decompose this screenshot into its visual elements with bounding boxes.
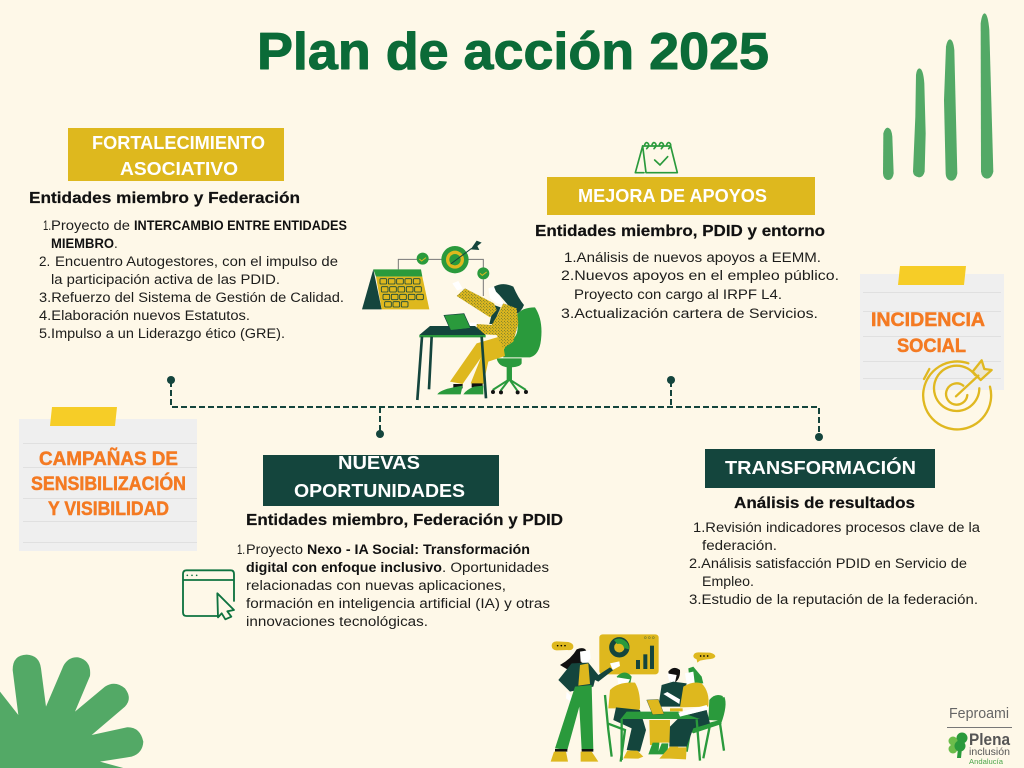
decoration: green bars	[883, 13, 993, 181]
paper	[860, 274, 1004, 390]
heading: mejora de apoyos	[547, 177, 815, 215]
seated person left	[608, 672, 646, 759]
list: nuevas oportunidades actions: 1.	[237, 542, 245, 557]
heading: nuevas oportunidades: OPORTUNIDADES	[294, 481, 465, 501]
list: nuevas oportunidades actions: Nexo - IA Social: Transformación	[307, 542, 530, 557]
heading: mejora de apoyos: MEJORA DE APOYOS	[578, 186, 767, 206]
label: SENSIBILIZACIÓN	[31, 473, 186, 495]
tape	[898, 266, 966, 285]
list: fortalecimiento actions: Proyecto de	[51, 218, 130, 233]
icon: browser window with cursor	[183, 570, 234, 619]
list: fortalecimiento actions: 3.Refuerzo del Sistema de Gestión de Calidad.	[39, 290, 344, 305]
logo: feproami: Feproami	[949, 705, 1009, 722]
woman	[437, 281, 524, 394]
list: nuevas oportunidades actions	[237, 542, 550, 629]
illustration: woman at desk with calendar and target	[362, 241, 541, 400]
list: transformación actions: 1.Revisión indicadores procesos clave de la	[693, 520, 981, 535]
heading: fortalecimiento asociativo	[68, 128, 284, 181]
panel: fortalecimiento asociativo	[29, 128, 347, 341]
tape	[50, 407, 117, 426]
list: transformación actions: federación.	[702, 538, 777, 553]
title: Plan de acción 2025	[257, 23, 769, 81]
list: transformación actions	[689, 520, 981, 607]
list: mejora actions: Proyecto con cargo al IRPF L4.	[574, 287, 782, 302]
list: nuevas oportunidades actions: Proyecto	[246, 542, 303, 557]
note: incidencia social	[860, 266, 1004, 429]
label: SOCIAL	[897, 336, 966, 357]
logo: plena inclusión: inclusión	[969, 746, 1010, 758]
heading: nuevas oportunidades: NUEVAS	[338, 453, 420, 473]
chair	[491, 307, 541, 394]
logo: plena inclusión	[948, 730, 1010, 766]
list: fortalecimiento actions: 1.	[43, 218, 51, 233]
decoration: green leaf	[0, 655, 143, 768]
list: fortalecimiento actions: MIEMBRO	[51, 236, 114, 251]
list: nuevas oportunidades actions: . Oportunidades	[442, 560, 549, 575]
list: fortalecimiento actions	[39, 218, 347, 341]
heading: fortalecimiento asociativo: FORTALECIMIENTO	[92, 133, 265, 153]
list: nuevas oportunidades actions: innovaciones tecnológicas.	[246, 614, 428, 629]
timeline connector	[167, 376, 823, 441]
list: nuevas oportunidades actions: formación en inteligencia artificial (IA) y otras	[246, 596, 550, 611]
note: campañas de sensibilización y visibilidad	[19, 407, 197, 551]
subheading: entidades miembro y federación: Entidades miembro y Federación	[29, 190, 300, 207]
list: fortalecimiento actions: 5.Impulso a un Liderazgo ético (GRE).	[39, 326, 285, 341]
desk and laptop	[417, 314, 486, 400]
speech bubbles	[552, 641, 715, 663]
list: mejora actions: 2.Nuevos apoyos en el empleo público.	[561, 268, 839, 283]
list: transformación actions: Empleo.	[702, 574, 754, 589]
subheading: entidades miembro, federación y pdid: Entidades miembro, Federación y PDID	[246, 512, 563, 529]
presentation board	[599, 634, 659, 674]
heading: transformación: TRANSFORMACIÓN	[725, 457, 916, 478]
heading: nuevas oportunidades	[263, 453, 499, 506]
check badges	[417, 253, 489, 279]
list: fortalecimiento actions: .	[114, 236, 118, 251]
label: INCIDENCIA	[871, 310, 985, 331]
standing presenter	[551, 648, 620, 762]
heading: transformación	[705, 449, 935, 488]
icon: calendar with check	[635, 143, 677, 173]
list: transformación actions: 3.Estudio de la reputación de la federación.	[689, 592, 978, 607]
list: mejora actions: 3.Actualización cartera de Servicios.	[561, 306, 818, 321]
target	[441, 241, 482, 273]
list: fortalecimiento actions: la participación activa de las PDID.	[51, 272, 280, 287]
paper	[19, 419, 197, 551]
label	[871, 310, 985, 357]
logo: plena inclusión: Plena	[969, 730, 1010, 749]
panel: nuevas oportunidades	[237, 453, 563, 629]
chairs	[605, 695, 725, 762]
illustration: team meeting around a table	[551, 634, 725, 762]
heading: fortalecimiento asociativo: ASOCIATIVO	[120, 159, 238, 179]
table and laptop	[621, 692, 708, 761]
subheading: análisis de resultados: Análisis de resultados	[734, 495, 915, 512]
calendar	[362, 269, 429, 309]
panel: mejora de apoyos	[535, 177, 839, 321]
list: fortalecimiento actions: Encuentro Autogestores, con el impulso de	[55, 254, 338, 269]
subheading: entidades miembro, pdid y entorno: Entidades miembro, PDID y entorno	[535, 223, 825, 240]
label: CAMPAÑAS DE	[39, 448, 178, 470]
label	[31, 448, 186, 520]
icon: target with arrow	[923, 360, 992, 429]
list: nuevas oportunidades actions: relacionadas con nuevas aplicaciones,	[246, 578, 506, 593]
list: transformación actions: 2.Análisis satisfacción PDID en Servicio de	[689, 556, 967, 571]
list: fortalecimiento actions: INTERCAMBIO ENTRE ENTIDADES	[134, 218, 347, 233]
connector lines	[398, 259, 483, 296]
label: Y VISIBILIDAD	[48, 499, 169, 520]
seated person back	[648, 668, 687, 754]
list: nuevas oportunidades actions: digital con enfoque inclusivo	[246, 560, 442, 575]
list: fortalecimiento actions: 2.	[39, 254, 50, 269]
list: mejora actions: 1.Análisis de nuevos apoyos a EEMM.	[564, 250, 821, 265]
seated person right	[659, 667, 710, 759]
logos: feproami and plena inclusión	[947, 705, 1012, 766]
logo: plena inclusión: Andalucía	[969, 757, 1004, 766]
list: mejora actions	[561, 250, 839, 321]
list: fortalecimiento actions: 4.Elaboración nuevos Estatutos.	[39, 308, 250, 323]
panel: transformación	[689, 449, 981, 607]
